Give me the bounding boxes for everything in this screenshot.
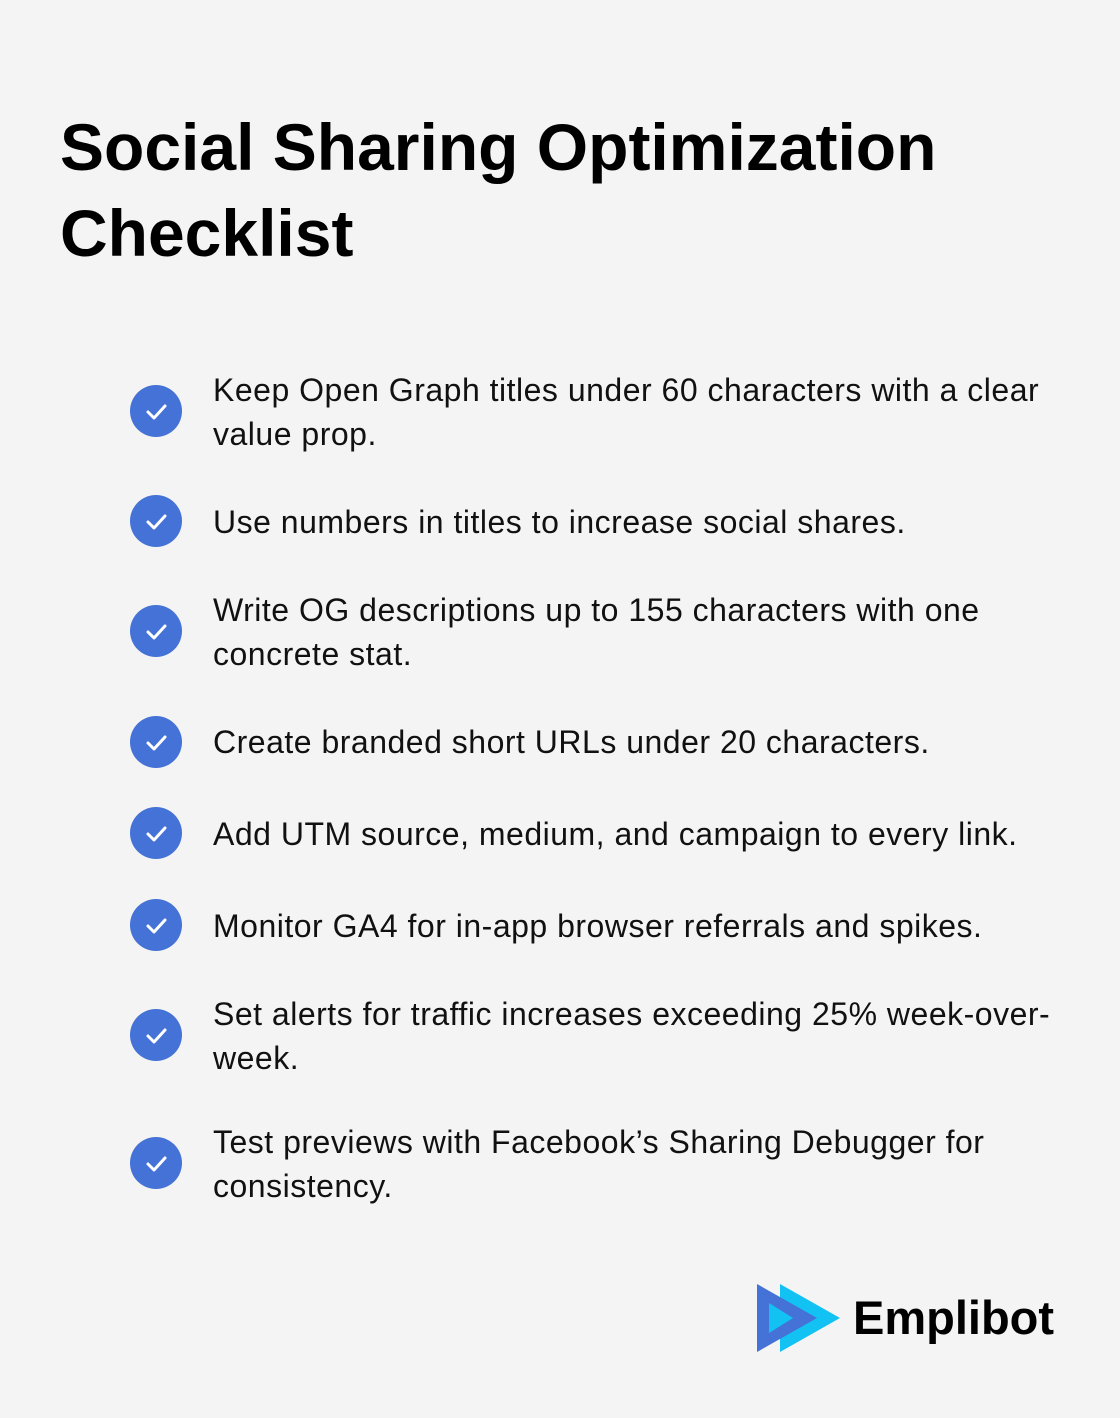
title: Checklist <box>60 196 353 270</box>
title: Social Sharing Optimization <box>60 110 936 184</box>
item 2: Use numbers in titles to increase social shares. <box>213 504 906 540</box>
icon: play triangles <box>757 1284 840 1352</box>
logo: Emplibot <box>757 1284 1054 1352</box>
item 4 <box>130 716 930 768</box>
item 1: Keep Open Graph titles under 60 characters with a clear value prop. <box>213 372 1039 452</box>
item 5: Add UTM source, medium, and campaign to every link. <box>213 816 1018 852</box>
logo text: Emplibot <box>853 1291 1054 1344</box>
item 6: Monitor GA4 for in-app browser referrals and spikes. <box>213 908 982 944</box>
item 5 <box>130 807 1018 859</box>
title <box>60 110 936 270</box>
item 6 <box>130 899 982 951</box>
item 4: Create branded short URLs under 20 characters. <box>213 724 930 760</box>
item 8: Test previews with Facebook’s Sharing Debugger for consistency. <box>213 1124 984 1204</box>
item 3: Write OG descriptions up to 155 characters with one concrete stat. <box>213 592 980 672</box>
item 7: Set alerts for traffic increases exceeding 25% week-over-week. <box>213 996 1050 1076</box>
item 2 <box>130 495 906 547</box>
